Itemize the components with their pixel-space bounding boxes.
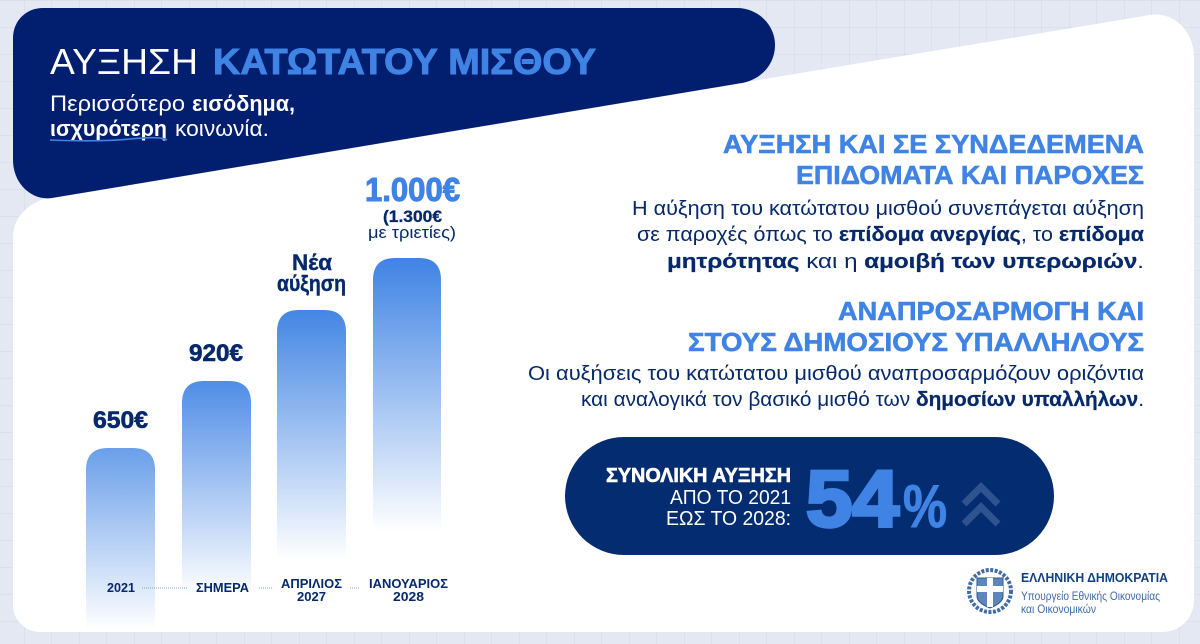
callout: total increase <box>565 437 1054 555</box>
timeline: 2021 <box>107 580 135 595</box>
value: 1000: 1.000€ <box>365 171 460 208</box>
callout value: 54 <box>806 454 900 543</box>
subtitle <box>50 91 295 141</box>
value: 1000 <box>365 171 460 242</box>
timeline: ΑΠΡΙΛΙΟΣ <box>281 576 342 591</box>
heading: linked benefits: ΕΠΙΔΟΜΑΤΑ ΚΑΙ ΠΑΡΟΧΕΣ <box>796 160 1144 190</box>
subtitle: κοινωνία. <box>175 116 269 141</box>
bar: January 2028 <box>373 258 441 632</box>
timeline <box>107 576 448 604</box>
value: 920: 920€ <box>189 340 243 367</box>
value: 1000: με τριετίες) <box>368 223 456 242</box>
heading: public employees <box>688 296 1144 357</box>
title: ΚΑΤΩΤΑΤΟΥ ΜΙΣΘΟΥ <box>213 41 596 82</box>
ministry name: Υπουργείο Εθνικής Οικονομίας <box>1021 589 1160 603</box>
callout label: ΣΥΝΟΛΙΚΗ ΑΥΞΗΣΗ <box>606 465 791 487</box>
subtitle: εισόδημα, <box>192 91 295 116</box>
bar: today <box>182 381 251 632</box>
timeline: ΣΗΜΕΡΑ <box>196 580 250 595</box>
text: linked benefits: Η αύξηση του κατώτατου μισθού συνεπάγεται αύξηση <box>632 198 1144 220</box>
bar: April 2027 <box>277 310 346 632</box>
subtitle: Περισσότερο <box>50 91 185 116</box>
icon: coat of arms <box>969 570 1011 612</box>
heading: public employees: ΣΤΟΥΣ ΔΗΜΟΣΙΟΥΣ ΥΠΑΛΛΗΛΟΥΣ <box>688 327 1144 357</box>
timeline: 2028 <box>393 589 424 604</box>
icon: double chevron up <box>964 487 998 524</box>
title <box>50 41 596 82</box>
section: public employees <box>528 296 1144 411</box>
callout label: ΕΩΣ ΤΟ 2028: <box>666 508 791 530</box>
callout label: ΑΠΟ ΤΟ 2021 <box>670 487 791 509</box>
bar: 2021 <box>86 448 155 632</box>
subtitle: ισχυρότερη <box>50 116 167 141</box>
text: linked benefits: σε παροχές όπως το επίδομα ανεργίας , το επίδομα <box>637 224 1145 246</box>
ministry name: ΕΛΛΗΝΙΚΗ ΔΗΜΟΚΡΑΤΙΑ <box>1021 571 1168 585</box>
header banner <box>13 8 775 198</box>
callout value: % <box>903 473 947 540</box>
value: new increase: αύξηση <box>277 271 346 296</box>
heading: linked benefits <box>723 129 1144 190</box>
heading: public employees: ΑΝΑΠΡΟΣΑΡΜΟΓΗ ΚΑΙ <box>838 296 1144 326</box>
logo: Hellenic Republic ministry <box>969 570 1168 616</box>
title: ΑΥΞΗΣΗ <box>50 41 198 82</box>
bar chart <box>86 171 460 632</box>
section: linked benefits <box>632 129 1145 273</box>
value: new increase: Νέα <box>292 250 332 275</box>
timeline: 2027 <box>297 589 326 604</box>
ministry name: και Οικονομικών <box>1021 602 1096 616</box>
value: new increase <box>277 250 346 296</box>
callout label <box>606 465 791 530</box>
text: public employees <box>528 363 1144 411</box>
value: 1000: (1.300€ <box>383 207 443 226</box>
timeline: ΙΑΝΟΥΑΡΙΟΣ <box>369 576 448 591</box>
value: 650: 650€ <box>93 407 148 434</box>
text: linked benefits <box>632 198 1145 273</box>
text: public employees: και αναλογικά τον βασικό μισθό των δημοσίων υπαλλήλων . <box>581 389 1144 411</box>
text: linked benefits: μητρότητας και η αμοιβή των υπερωριών . <box>667 251 1144 273</box>
heading: linked benefits: ΑΥΞΗΣΗ ΚΑΙ ΣΕ ΣΥΝΔΕΔΕΜΕΝΑ <box>723 129 1144 159</box>
ministry name <box>1021 571 1168 616</box>
text: public employees: Οι αυξήσεις του κατώτατου μισθού αναπροσαρμόζουν οριζόντια <box>528 363 1144 385</box>
callout value <box>806 454 947 543</box>
